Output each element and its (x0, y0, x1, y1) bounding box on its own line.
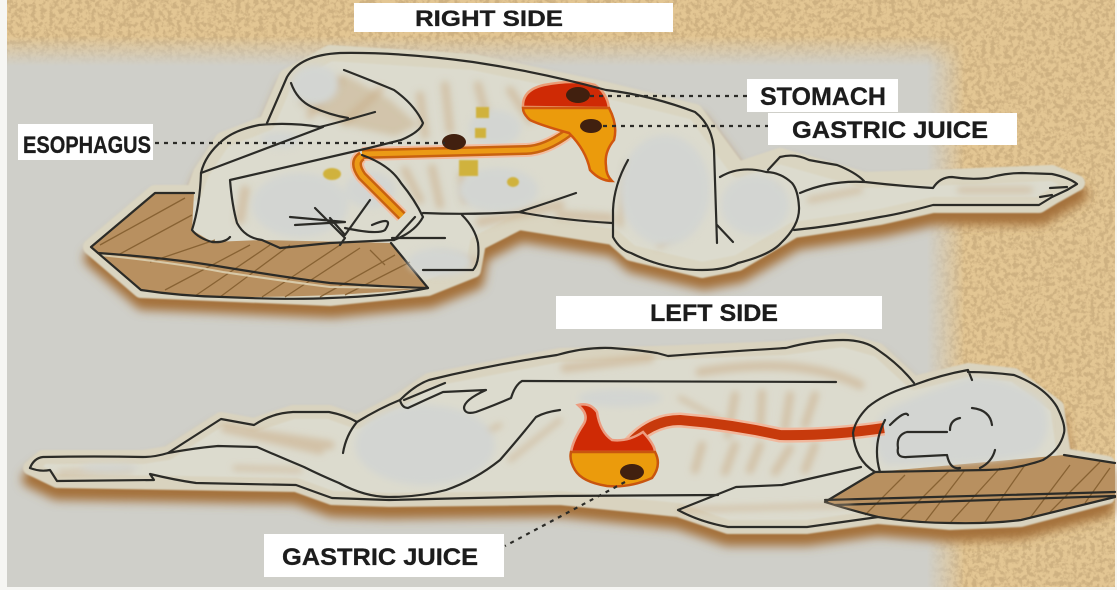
body outline (192, 53, 1077, 270)
yellow spots (323, 107, 519, 187)
label: esophagus: ESOPHAGUS (23, 132, 151, 159)
esophagus (357, 132, 569, 216)
heading: right side: RIGHT SIDE (415, 6, 563, 31)
heading: left side (556, 296, 882, 329)
figure: sleeping on right side (91, 53, 1079, 309)
label: gastric juice, left side: GASTRIC JUICE (282, 544, 478, 571)
dark marker spots (442, 87, 602, 150)
heading: left side: LEFT SIDE (650, 300, 778, 327)
dotted leader lines (155, 96, 768, 546)
label: esophagus (18, 124, 153, 160)
stomach with gastric juice (570, 404, 658, 486)
esophagus (628, 420, 884, 446)
stomach with gastric juice (523, 82, 615, 181)
figure: sleeping on left side (30, 340, 1115, 538)
label: stomach: STOMACH (760, 83, 886, 111)
heading: right side (354, 3, 673, 32)
body outline (30, 340, 1064, 527)
ribs and shading (60, 358, 860, 510)
body shadow and halo (91, 53, 1079, 309)
body fill highlights (252, 65, 789, 276)
label: gastric juice, right side: GASTRIC JUICE (792, 117, 988, 144)
pillow (825, 455, 1115, 523)
body fill highlights (80, 378, 1048, 485)
label: gastric juice, left side (264, 534, 504, 577)
ribs and shading (240, 75, 1030, 262)
pillow (91, 193, 428, 299)
body shadow and halo (30, 340, 1108, 538)
label: gastric juice, right side (768, 113, 1017, 145)
dark marker spot (620, 464, 644, 480)
